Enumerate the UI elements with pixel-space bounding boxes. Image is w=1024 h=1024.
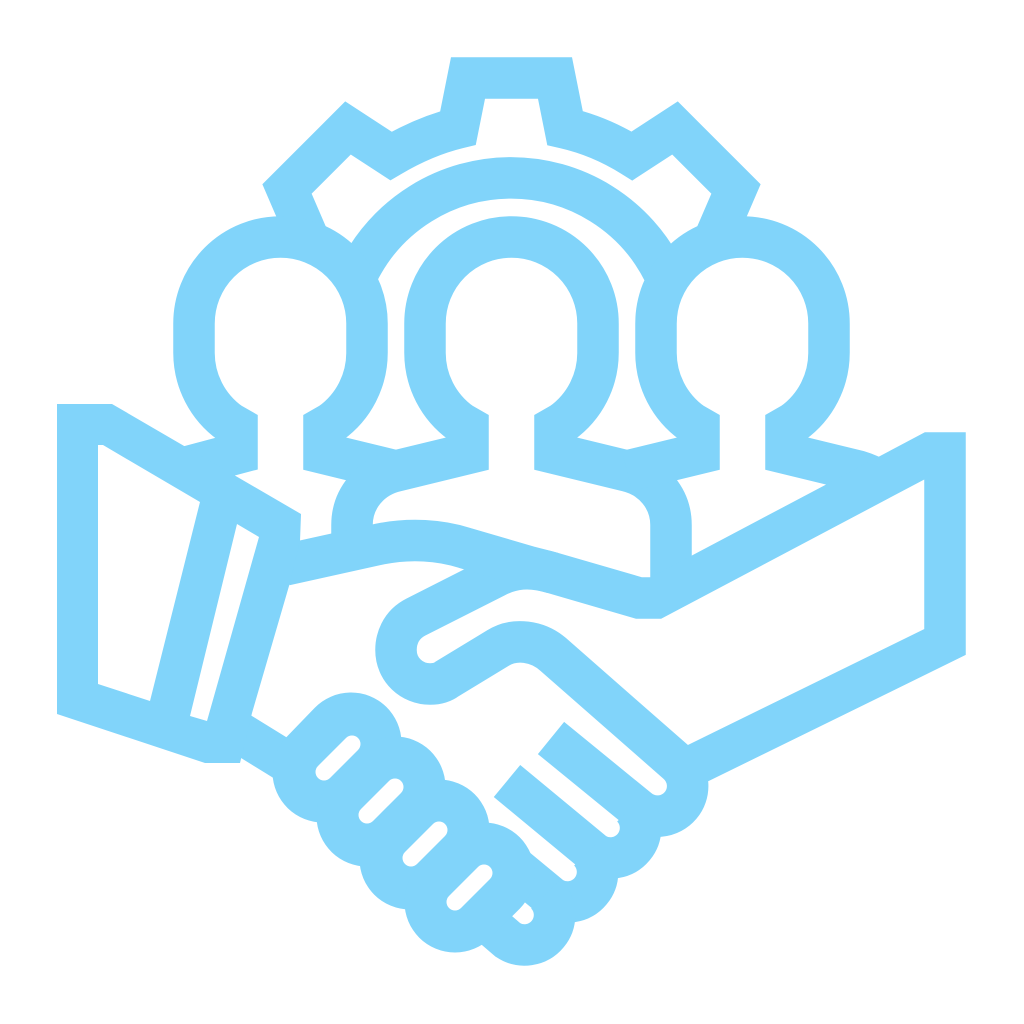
icon: finger two (507, 781, 641, 858)
icon: knuckle four (455, 873, 484, 902)
icon: finger three (505, 851, 598, 902)
icon: left hand knuckles (323, 743, 484, 902)
icon: left forearm (285, 541, 553, 573)
icon: right cuff and forearm with fingertip one (396, 453, 945, 816)
icon: knuckle two (367, 787, 395, 816)
icon: finger four (487, 894, 555, 945)
icon: knuckle three (410, 830, 439, 859)
icon group (175, 78, 945, 945)
icon: right person (627, 237, 884, 483)
icon: highlight one (324, 744, 352, 772)
icon: gear outline (287, 78, 736, 240)
icon: highlight four (455, 873, 484, 902)
icon: gear inner arc (358, 178, 664, 273)
icon: left wrist (240, 733, 300, 770)
icon: highlight three (411, 830, 439, 858)
icon: center person (352, 237, 671, 580)
icon: knuckle one (323, 743, 351, 772)
icon: highlight two (367, 787, 395, 815)
icon: left cuff (57, 404, 301, 763)
icon: left person (175, 237, 396, 471)
icon: knuckle highlights (324, 744, 484, 902)
